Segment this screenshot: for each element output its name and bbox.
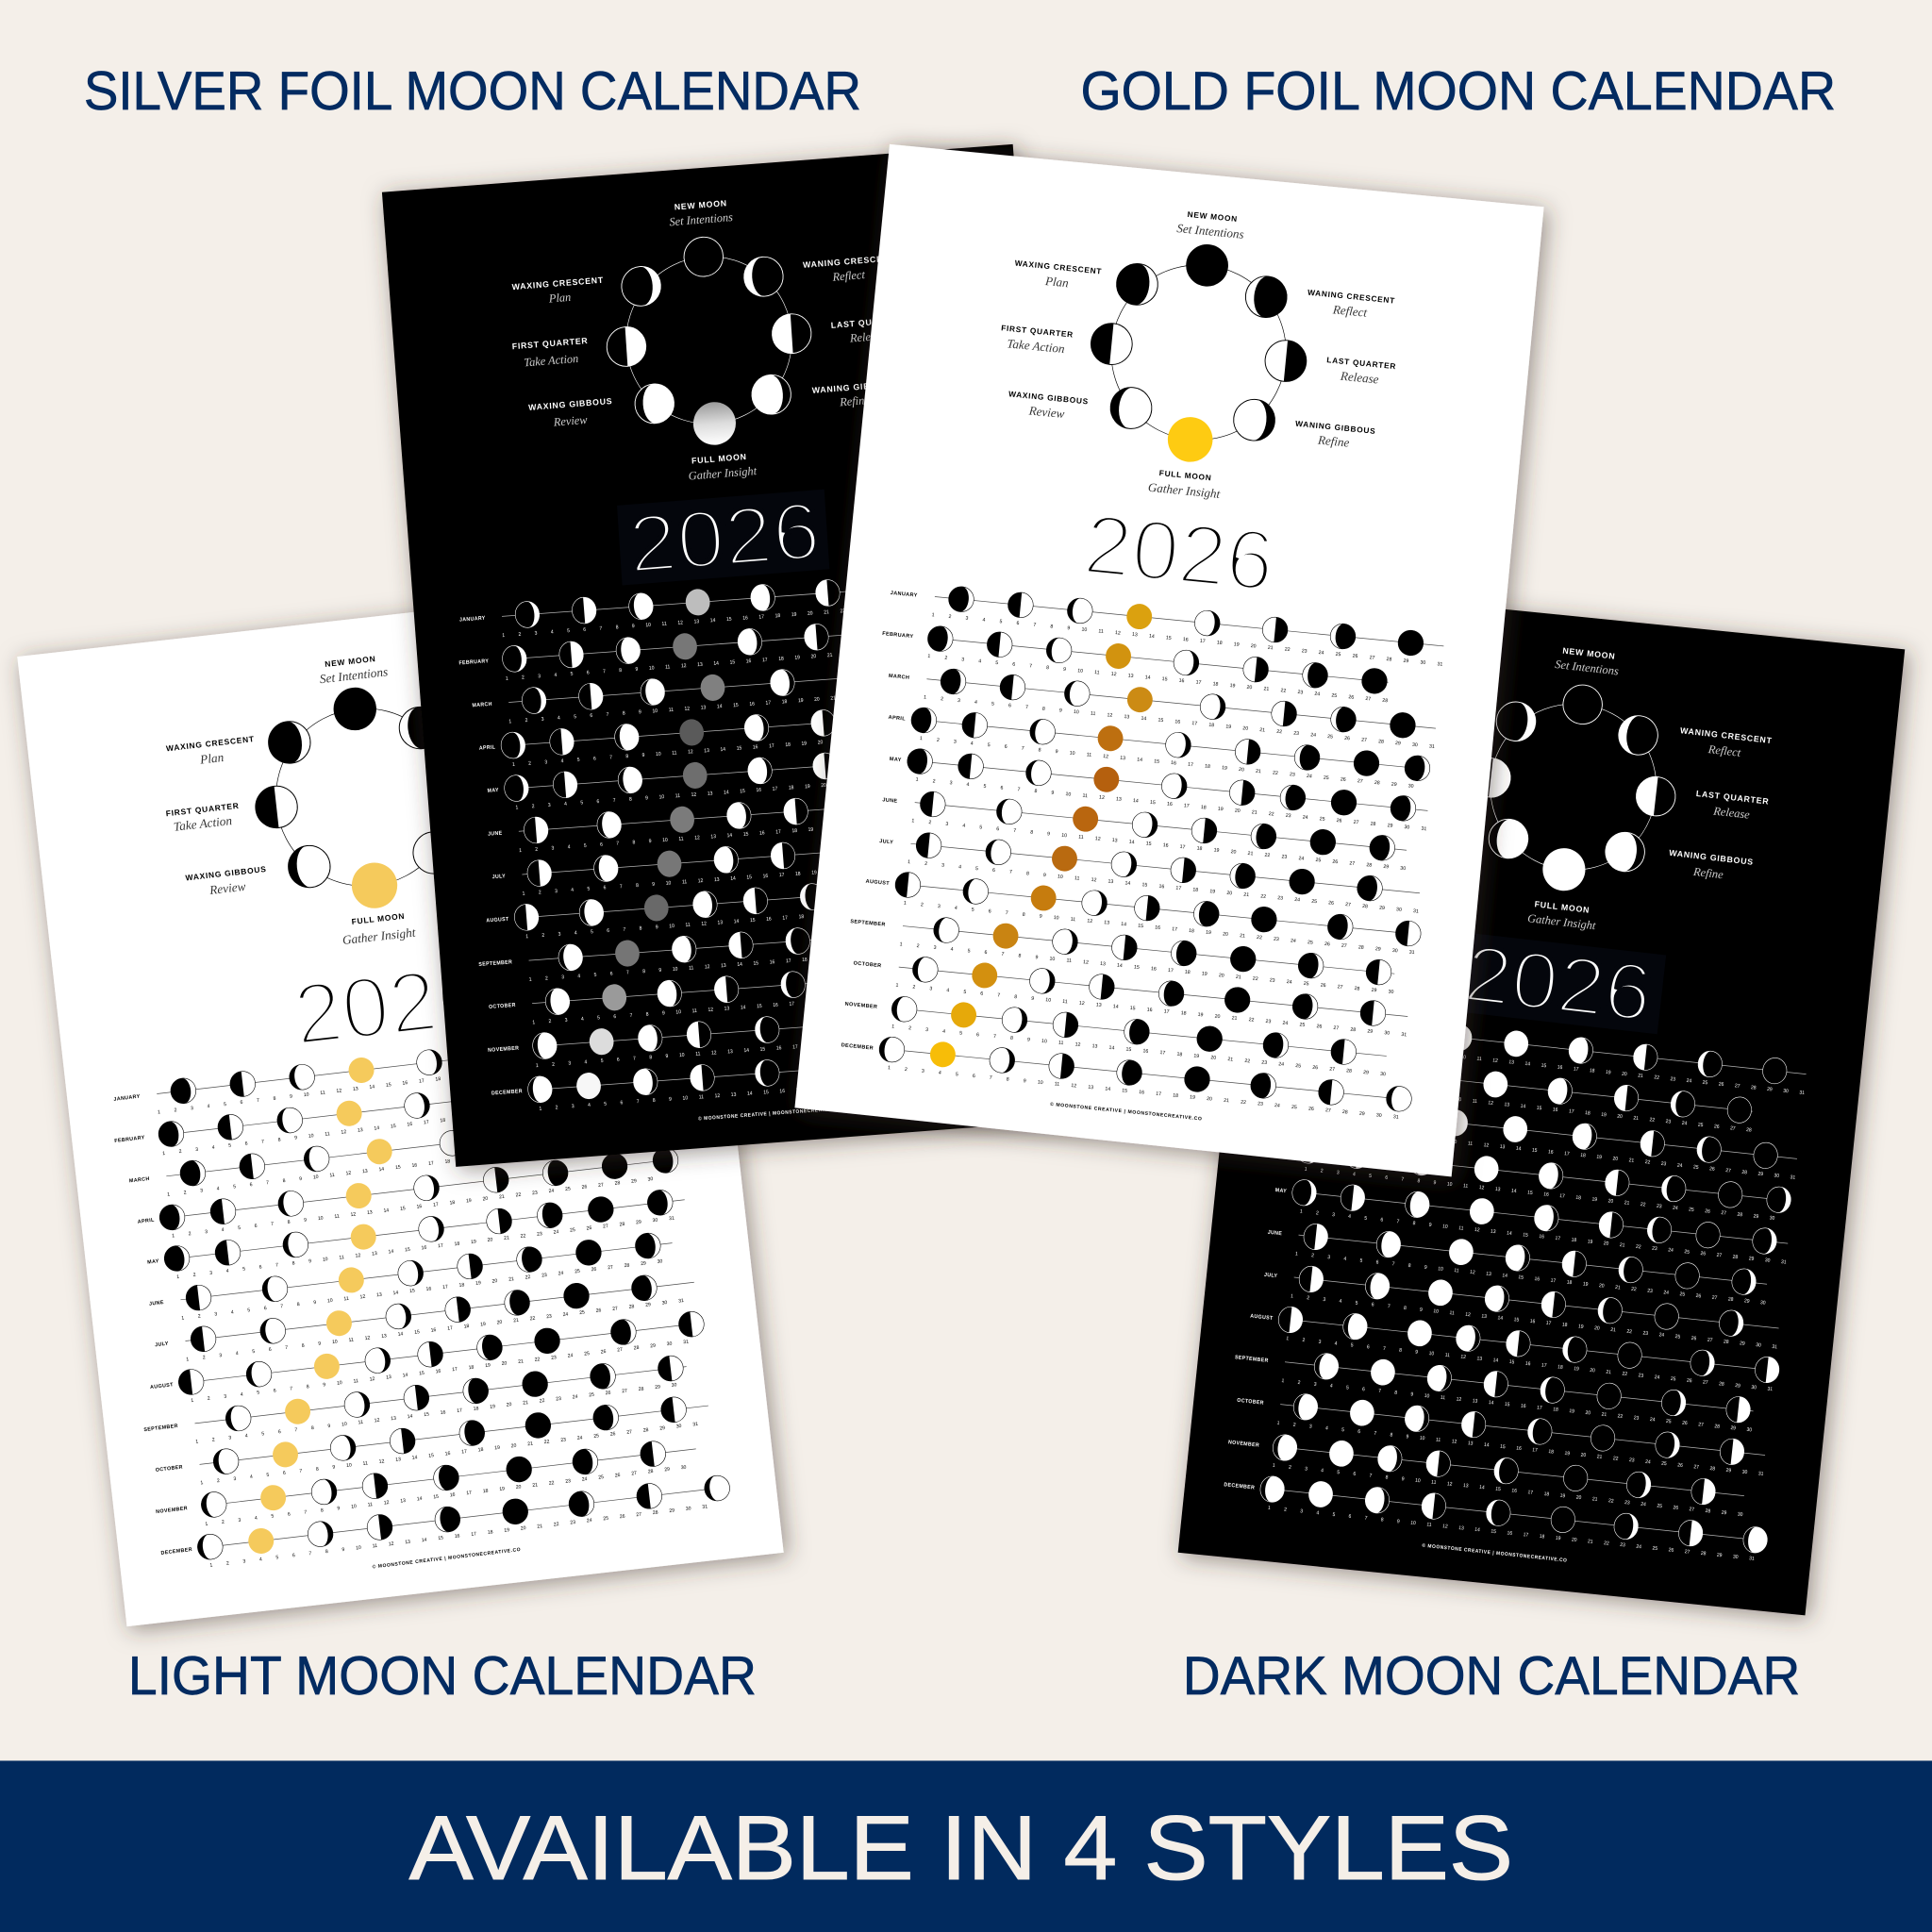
moon ring and labels: light: Take Action (173, 813, 233, 834)
monthly moon rows: dark: 1 2 3 4 5 6 7 8 9 10 11 12 13 14 15 16 17 18 19 20 21 22 23 24 25 26 27 28 29 30 (1270, 1462, 1743, 1518)
month labels, dates and footer: light: MARCH (129, 1176, 150, 1184)
month labels, dates and footer: light: DECEMBER (160, 1547, 192, 1557)
moon ring and labels: gold foil: Reflect (1331, 302, 1368, 320)
month labels, dates and footer: light: AUGUST (150, 1382, 175, 1391)
moon ring and labels: dark: WANING CRESCENT (1680, 725, 1773, 745)
month labels, dates and footer: light: 1 2 3 4 5 6 7 8 9 10 11 12 13 14 15 16 17 18 19 20 21 22 23 24 25 26 27 28 29 30 (169, 1176, 654, 1240)
moon ring and labels: light: NEW MOON (325, 654, 376, 669)
moon ring and labels: gold foil: Review (1027, 403, 1065, 421)
monthly moon rows: silver foil: 1 2 3 4 5 6 7 8 9 10 11 12 13 14 15 16 17 18 19 20 21 22 23 24 25 26 27 28 29 30 31 (513, 770, 1005, 811)
moon ring and labels: gold foil: Gather Insight (1147, 480, 1221, 501)
paper: silver foil (382, 144, 1087, 1167)
month labels, dates and footer: light: 1 2 3 4 5 6 7 8 9 10 11 12 13 14 15 16 17 18 19 20 21 22 23 24 25 26 27 28 (159, 1098, 611, 1158)
monthly moon rows: gold foil: © MOONSTONE CREATIVE | MOONSTONECREATIVE.CO (1050, 1101, 1203, 1123)
moon ring and labels: gold foil: Release (1339, 369, 1379, 387)
monthly moon rows: gold foil: APRIL (888, 715, 906, 723)
monthly moon rows: dark: JULY (1264, 1273, 1278, 1279)
moon ring and labels: dark: Set Intentions (1555, 658, 1620, 677)
monthly moon rows: dark: 1 2 3 4 5 6 7 8 9 10 11 12 13 14 15 16 17 18 19 20 21 22 23 24 25 26 27 28 (1310, 1081, 1752, 1134)
monthly moon rows: silver foil: JULY (492, 874, 506, 880)
monthly moon rows: gold foil: 1 2 3 4 5 6 7 8 9 10 11 12 13 14 15 16 17 18 19 20 21 22 23 24 25 26 27 28 29 30 31 (921, 694, 1435, 750)
moon ring and labels: gold foil: 2026 (1080, 496, 1278, 609)
moon ring and labels: silver foil: WAXING CRESCENT (511, 275, 604, 291)
moon ring and labels: dark (1350, 626, 1784, 1050)
monthly moon rows: silver foil: 1 2 3 4 5 6 7 8 9 10 11 12 13 14 15 16 17 18 19 20 21 22 23 24 25 26 27 28 29 30 31 (506, 684, 998, 725)
moon ring and labels: dark: Gather Insight (1527, 911, 1597, 932)
month labels, dates and footer: light: SEPTEMBER (143, 1424, 178, 1433)
moon ring and labels: gold foil: WAXING CRESCENT (1014, 258, 1103, 276)
monthly moon rows: silver foil: AUGUST (486, 917, 509, 924)
monthly moon rows: silver foil: 1 2 3 4 5 6 7 8 9 10 11 12 13 14 15 16 17 18 19 20 21 22 23 24 25 26 27 28 29 30 (509, 728, 986, 768)
month labels, dates and footer: light: OCTOBER (156, 1464, 183, 1474)
moon ring and labels: silver foil: FULL MOON (691, 452, 747, 465)
monthly moon rows: gold foil: MAY (890, 757, 902, 763)
monthly moon rows: gold foil: JUNE (882, 797, 898, 805)
monthly moon rows: silver foil: MAY (487, 788, 499, 794)
moon ring and labels: silver foil (504, 185, 921, 599)
monthly moon rows: silver foil: 1 2 3 4 5 6 7 8 9 10 11 12 13 14 15 16 17 18 19 20 21 22 23 24 25 26 27 28 29 30 (516, 814, 992, 854)
month labels, dates and footer: light: FEBRUARY (114, 1135, 145, 1144)
monthly moon rows: silver foil: JANUARY (459, 616, 486, 624)
month labels, dates and footer: light: 1 2 3 4 5 6 7 8 9 10 11 12 13 14 15 16 17 18 19 20 21 22 23 24 25 26 27 28 29 30 (202, 1465, 687, 1527)
monthly moon rows: silver foil: 1 2 3 4 5 6 7 8 9 10 11 12 13 14 15 16 17 18 19 20 21 22 23 24 25 26 27 28 29 30 31 (520, 856, 1012, 897)
month labels, dates and footer: light: 1 2 3 4 5 6 7 8 9 10 11 12 13 14 15 16 17 18 19 20 21 22 23 24 25 26 27 28 29 30 31 (188, 1340, 689, 1404)
month labels, dates and footer: light: JUNE (149, 1300, 164, 1307)
moon ring and labels: dark: Refine (1691, 865, 1724, 881)
moon ring and labels: gold foil: LAST QUARTER (1326, 355, 1397, 371)
moon ring and labels: dark: WAXING CRESCENT (1390, 693, 1482, 713)
monthly moon rows: dark: DECEMBER (1224, 1482, 1255, 1491)
monthly moon rows: silver foil: APRIL (479, 744, 496, 752)
heading: light moon calendar: LIGHT MOON CALENDAR (128, 1646, 757, 1707)
monthly moon rows: gold foil: FEBRUARY (882, 631, 914, 640)
month labels, dates and footer: light: 1 2 3 4 5 6 7 8 9 10 11 12 13 14 15 16 17 18 19 20 21 22 23 24 25 26 27 28 29 30 31 (174, 1216, 675, 1280)
monthly moon rows: dark: 1 2 3 4 5 6 7 8 9 10 11 12 13 14 15 16 17 18 19 20 21 22 23 24 25 26 27 28 29 30 (1278, 1378, 1752, 1433)
moon ring and labels: light: 2026 (290, 947, 489, 1064)
monthly moon rows: dark: FEBRUARY (1270, 1058, 1301, 1068)
moon ring and labels: silver foil: Plan (547, 291, 572, 306)
moon ring and labels: light: FULL MOON (351, 911, 406, 926)
moon ring and labels: gold foil: WANING CRESCENT (1307, 288, 1395, 306)
monthly moon rows: gold foil: 1 2 3 4 5 6 7 8 9 10 11 12 13 14 15 16 17 18 19 20 21 22 23 24 25 26 27 28 29 30 31 (892, 983, 1407, 1038)
monthly moon rows: gold foil: DECEMBER (841, 1042, 874, 1052)
moon ring and labels: gold foil: FULL MOON (1158, 468, 1212, 482)
month labels, dates and footer: light: APRIL (138, 1218, 155, 1225)
monthly moon rows: gold foil: 1 2 3 4 5 6 7 8 9 10 11 12 13 14 15 16 17 18 19 20 21 22 23 24 25 26 27 28 29 30 (917, 736, 1414, 790)
moon ring and labels: silver foil: Set Intentions (669, 210, 733, 228)
moon ring and labels: gold foil: WAXING GIBBOUS (1008, 389, 1089, 407)
monthly moon rows: gold foil: MARCH (889, 674, 909, 681)
monthly moon rows: gold foil: 1 2 3 4 5 6 7 8 9 10 11 12 13 14 15 16 17 18 19 20 21 22 23 24 25 26 27 28 29 30 (896, 941, 1394, 995)
monthly moon rows: gold foil (834, 579, 1457, 1142)
monthly moon rows: silver foil: MARCH (472, 702, 492, 708)
month labels, dates and footer: light: JULY (155, 1341, 169, 1348)
moon ring and labels: dark: NEW MOON (1562, 646, 1616, 661)
monthly moon rows: dark: AUGUST (1250, 1313, 1274, 1322)
moon rows: light (144, 1021, 731, 1561)
moon ring and labels: silver foil: Review (552, 413, 589, 429)
moon ring and labels: silver foil: Take Action (524, 352, 579, 369)
monthly moon rows: dark: 1 2 3 4 5 6 7 8 9 10 11 12 13 14 15 16 17 18 19 20 21 22 23 24 25 26 27 28 29 30 (1292, 1251, 1766, 1307)
moon ring and labels: dark: Plan (1422, 709, 1446, 725)
moon ring and labels: dark: FIRST QUARTER (1377, 755, 1455, 773)
moon ring and labels: dark: LAST QUARTER (1695, 789, 1770, 807)
monthly moon rows: silver foil: NOVEMBER (488, 1045, 520, 1054)
monthly moon rows: gold foil: 1 2 3 4 5 6 7 8 9 10 11 12 13 14 15 16 17 18 19 20 21 22 23 24 25 26 27 28 (924, 654, 1388, 704)
moon ring and labels: light: Release (508, 779, 550, 798)
monthly moon rows: dark: MARCH (1275, 1102, 1296, 1110)
moon ring and labels: light: WAXING GIBBOUS (185, 864, 267, 882)
monthly moon rows: silver foil: OCTOBER (489, 1003, 516, 1010)
calendar: silver foil (382, 144, 1087, 1167)
monthly moon rows: dark (1217, 1005, 1819, 1585)
moon ring and labels: light: WAXING CRESCENT (166, 734, 255, 753)
moon ring and labels: dark: Review (1406, 832, 1441, 850)
monthly moon rows: gold foil: 1 2 3 4 5 6 7 8 9 10 11 12 13 14 15 16 17 18 19 20 21 22 23 24 25 26 27 28 29 30 (908, 818, 1406, 872)
monthly moon rows: silver foil: 1 2 3 4 5 6 7 8 9 10 11 12 13 14 15 16 17 18 19 20 21 22 23 24 25 26 27 28 29 30 31 (499, 598, 991, 639)
heading: dark moon calendar: DARK MOON CALENDAR (1183, 1646, 1800, 1707)
heading: gold foil moon calendar: GOLD FOIL MOON CALENDAR (1080, 61, 1836, 122)
moon ring and labels: silver foil: LAST QUARTER (831, 315, 905, 330)
moon ring and labels: silver foil: Reflect (831, 268, 866, 284)
monthly moon rows: dark: APRIL (1274, 1145, 1291, 1153)
moon ring and labels: dark: FULL MOON (1534, 899, 1591, 915)
month labels, dates and footer: light: JANUARY (113, 1094, 141, 1103)
monthly moon rows: silver foil: SEPTEMBER (478, 959, 512, 968)
moon ring and labels: light: Plan (198, 750, 225, 767)
monthly moon rows: dark: 1 2 3 4 5 6 7 8 9 10 11 12 13 14 15 16 17 18 19 20 21 22 23 24 25 26 27 28 29 30 31 (1274, 1420, 1764, 1477)
monthly moon rows: gold foil: 1 2 3 4 5 6 7 8 9 10 11 12 13 14 15 16 17 18 19 20 21 22 23 24 25 26 27 28 29 30 31 (912, 776, 1427, 832)
moon ring and labels: gold foil: NEW MOON (1187, 209, 1238, 224)
moon ring and labels: silver foil: WAXING GIBBOUS (528, 396, 613, 412)
monthly moon rows: dark: 1 2 3 4 5 6 7 8 9 10 11 12 13 14 15 16 17 18 19 20 21 22 23 24 25 26 27 28 29 30 31 (1265, 1505, 1755, 1562)
month labels, dates and footer: light: 1 2 3 4 5 6 7 8 9 10 11 12 13 14 15 16 17 18 19 20 21 22 23 24 25 26 27 28 29 30 (192, 1382, 677, 1445)
month labels, dates and footer: light: 1 2 3 4 5 6 7 8 9 10 11 12 13 14 15 16 17 18 19 20 21 22 23 24 25 26 27 28 29 30 31 (183, 1298, 684, 1363)
moon ring and labels: light: Refine (500, 848, 534, 866)
monthly moon rows: dark: 1 2 3 4 5 6 7 8 9 10 11 12 13 14 15 16 17 18 19 20 21 22 23 24 25 26 27 28 29 30 31 (1288, 1293, 1777, 1350)
paper: light (17, 583, 784, 1626)
monthly moon rows: silver foil: 1 2 3 4 5 6 7 8 9 10 11 12 13 14 15 16 17 18 19 20 21 22 23 24 25 26 27 28 29 30 (526, 943, 1003, 983)
moon ring and labels: silver foil: Refine (839, 393, 871, 408)
heading: silver foil moon calendar: SILVER FOIL MOON CALENDAR (84, 61, 861, 122)
moon ring and labels: light: FIRST QUARTER (165, 801, 240, 818)
moon ring and labels: light: WANING GIBBOUS (475, 834, 558, 852)
monthly moon rows: silver foil (451, 567, 1041, 1137)
moon ring and labels: dark: Take Action (1387, 769, 1442, 788)
monthly moon rows: gold foil: JANUARY (890, 591, 918, 599)
monthly moon rows: silver foil: 1 2 3 4 5 6 7 8 9 10 11 12 13 14 15 16 17 18 19 20 21 22 23 24 25 26 27 28 29 30 31 (529, 985, 1022, 1026)
calendar: dark (1178, 587, 1905, 1615)
monthly moon rows: silver foil: DECEMBER (491, 1089, 523, 1097)
moon ring and labels: light: Reflect (488, 715, 525, 733)
monthly moon rows: gold foil: 1 2 3 4 5 6 7 8 9 10 11 12 13 14 15 16 17 18 19 20 21 22 23 24 25 26 27 28 29 30 (889, 1024, 1386, 1077)
monthly moon rows: silver foil: 1 2 3 4 5 6 7 8 9 10 11 12 13 14 15 16 17 18 19 20 21 22 23 24 25 26 27 28 29 30 31 (537, 1071, 1028, 1112)
monthly moon rows: dark: © MOONSTONE CREATIVE | MOONSTONECREATIVE.CO (1422, 1541, 1568, 1564)
moon ring and labels: dark: Release (1712, 804, 1751, 822)
monthly moon rows: dark: SEPTEMBER (1235, 1355, 1269, 1364)
monthly moon rows: dark: 1 2 3 4 5 6 7 8 9 10 11 12 13 14 15 16 17 18 19 20 21 22 23 24 25 26 27 28 29 30 31 (1315, 1040, 1805, 1096)
moon ring and labels: gold foil (976, 192, 1409, 620)
monthly moon rows: silver foil: FEBRUARY (458, 658, 489, 667)
monthly moon rows: silver foil: 1 2 3 4 5 6 7 8 9 10 11 12 13 14 15 16 17 18 19 20 21 22 23 24 25 26 27 28 (503, 644, 946, 682)
banner (0, 1760, 1932, 1932)
month labels, dates and footer: light: 1 2 3 4 5 6 7 8 9 10 11 12 13 14 15 16 17 18 19 20 21 22 23 24 25 26 27 28 29 30 31 (197, 1422, 698, 1487)
moon ring and labels: silver foil: Release (848, 329, 887, 345)
moon ring and labels: silver foil: WANING GIBBOUS (811, 379, 897, 395)
moon ring and labels: gold foil: Take Action (1007, 336, 1065, 356)
monthly moon rows: dark: MAY (1274, 1188, 1287, 1194)
month labels, dates and footer: light: 1 2 3 4 5 6 7 8 9 10 11 12 13 14 15 16 17 18 19 20 21 22 23 24 25 26 27 28 29 30 (178, 1258, 663, 1322)
moon ring and labels: gold foil: Plan (1043, 274, 1069, 290)
moon ring and labels: dark: Reflect (1707, 742, 1741, 759)
moon ring and labels: gold foil: Set Intentions (1176, 221, 1244, 242)
monthly moon rows: gold foil: 1 2 3 4 5 6 7 8 9 10 11 12 13 14 15 16 17 18 19 20 21 22 23 24 25 26 27 28 29 30 31 (928, 612, 1443, 668)
moon ring and labels: light (151, 635, 593, 1075)
month labels, dates and footer: light: 1 2 3 4 5 6 7 8 9 10 11 12 13 14 15 16 17 18 19 20 21 22 23 24 25 26 27 28 29 30 31 (207, 1504, 708, 1569)
monthly moon rows: dark: 1 2 3 4 5 6 7 8 9 10 11 12 13 14 15 16 17 18 19 20 21 22 23 24 25 26 27 28 29 30 31 (1306, 1124, 1796, 1181)
moon ring and labels: light: Gather Insight (341, 925, 416, 947)
monthly moon rows: silver foil: © MOONSTONE CREATIVE | MOONSTONECREATIVE.CO (698, 1105, 844, 1123)
moon ring and labels: silver foil: NEW MOON (674, 198, 727, 212)
monthly moon rows: dark: 1 2 3 4 5 6 7 8 9 10 11 12 13 14 15 16 17 18 19 20 21 22 23 24 25 26 27 28 29 30 31 (1283, 1336, 1773, 1392)
moon ring and labels: light: Set Intentions (319, 664, 389, 686)
monthly moon rows: gold foil: 1 2 3 4 5 6 7 8 9 10 11 12 13 14 15 16 17 18 19 20 21 22 23 24 25 26 27 28 29 30 31 (885, 1065, 1399, 1121)
monthly moon rows: dark: JUNE (1267, 1230, 1282, 1237)
monthly moon rows: silver foil: JUNE (488, 830, 503, 838)
monthly moon rows: gold foil: 1 2 3 4 5 6 7 8 9 10 11 12 13 14 15 16 17 18 19 20 21 22 23 24 25 26 27 28 29 30 31 (905, 859, 1419, 915)
paper: dark (1178, 587, 1905, 1615)
moon ring and labels: gold foil: WANING GIBBOUS (1295, 419, 1376, 436)
monthly moon rows: silver foil: 1 2 3 4 5 6 7 8 9 10 11 12 13 14 15 16 17 18 19 20 21 22 23 24 25 26 27 28 29 30 31 (523, 899, 1015, 941)
monthly moon rows: dark: NOVEMBER (1228, 1440, 1259, 1449)
monthly moon rows: dark: 1 2 3 4 5 6 7 8 9 10 11 12 13 14 15 16 17 18 19 20 21 22 23 24 25 26 27 28 29 30 (1302, 1166, 1775, 1222)
month labels, dates and footer: light: MAY (147, 1258, 159, 1266)
paper: gold foil (794, 144, 1544, 1176)
moon ring and labels: light: Review (208, 879, 246, 897)
moon ring and labels: silver foil: FIRST QUARTER (511, 336, 589, 351)
monthly moon rows: gold foil: NOVEMBER (844, 1002, 878, 1010)
calendar: light (17, 583, 784, 1626)
moon ring and labels: dark: 2026 (1460, 929, 1657, 1040)
month labels, dates and footer: light: 1 2 3 4 5 6 7 8 9 10 11 12 13 14 15 16 17 18 19 20 21 22 23 24 25 26 27 28 29 30 31 (155, 1051, 656, 1116)
monthly moon rows: silver foil: 1 2 3 4 5 6 7 8 9 10 11 12 13 14 15 16 17 18 19 20 21 22 23 24 25 26 27 28 29 30 (533, 1029, 1009, 1069)
moon ring and labels: dark: WAXING GIBBOUS (1383, 818, 1468, 836)
moon ring and labels: gold foil: Refine (1316, 432, 1350, 450)
monthly moon rows: gold foil: AUGUST (865, 879, 890, 887)
monthly moon rows: dark: JANUARY (1278, 1017, 1306, 1025)
monthly moon rows: dark: OCTOBER (1237, 1398, 1264, 1407)
month labels, dates and footer: light (106, 1033, 710, 1595)
moon ring and labels: gold foil: FIRST QUARTER (1001, 323, 1074, 340)
month labels, dates and footer: light: © MOONSTONE CREATIVE | MOONSTONECREATIVE.CO (372, 1546, 522, 1571)
month labels, dates and footer: light: NOVEMBER (156, 1506, 188, 1515)
moon ring and labels: silver foil: Gather Insight (688, 464, 758, 483)
calendar: gold foil (794, 144, 1544, 1176)
moon ring and labels: silver foil: WANING CRESCENT (803, 253, 895, 270)
moon ring and labels: silver foil: 2026 (626, 485, 823, 591)
moon ring and labels: light: WANING CRESCENT (459, 700, 550, 719)
monthly moon rows: gold foil: 1 2 3 4 5 6 7 8 9 10 11 12 13 14 15 16 17 18 19 20 21 22 23 24 25 26 27 28 29 30 31 (901, 900, 1415, 956)
moon ring and labels: dark: WANING GIBBOUS (1669, 848, 1754, 867)
month labels, dates and footer: light: 1 2 3 4 5 6 7 8 9 10 11 12 13 14 15 16 17 18 19 20 21 22 23 24 25 26 27 28 29 30 31 (164, 1133, 665, 1198)
monthly moon rows: gold foil: OCTOBER (853, 960, 882, 969)
monthly moon rows: gold foil: SEPTEMBER (850, 919, 886, 928)
moon ring and labels: light: LAST QUARTER (493, 765, 564, 782)
monthly moon rows: dark: 1 2 3 4 5 6 7 8 9 10 11 12 13 14 15 16 17 18 19 20 21 22 23 24 25 26 27 28 29 30 31 (1297, 1208, 1787, 1266)
monthly moon rows: gold foil: JULY (879, 839, 893, 845)
banner: AVAILABLE IN 4 STYLES (409, 1798, 1513, 1899)
